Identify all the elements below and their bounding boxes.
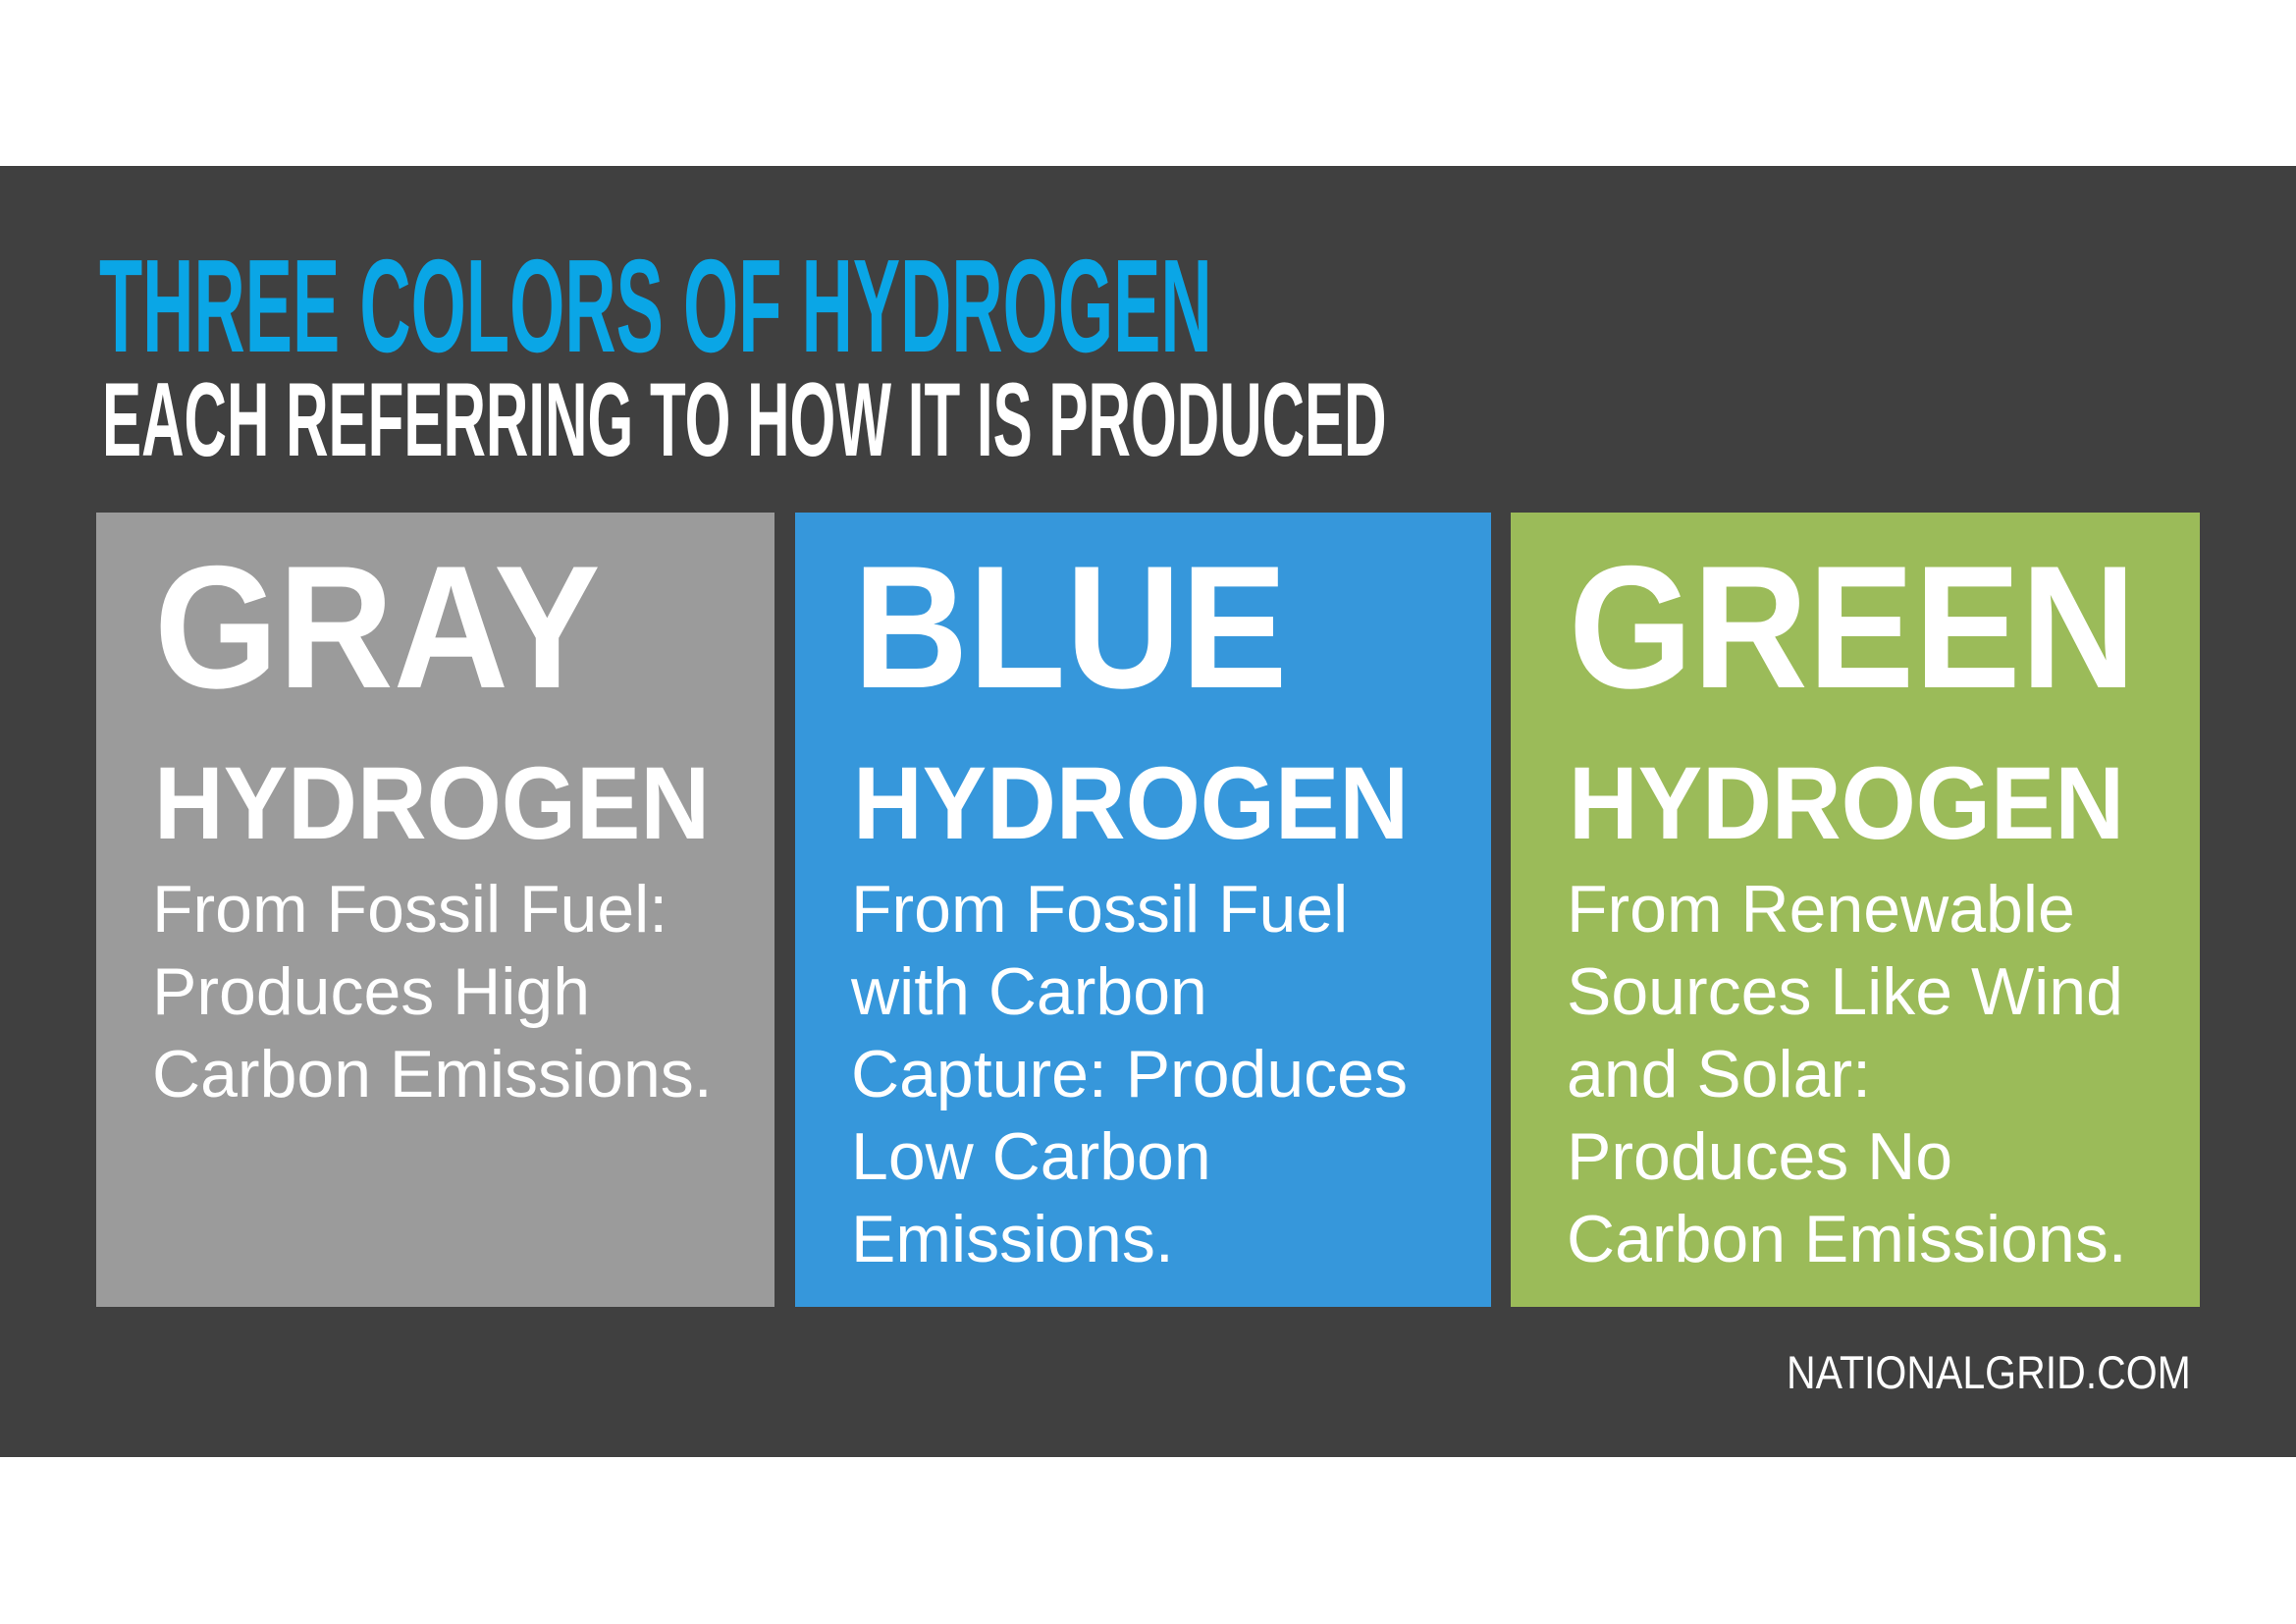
heading: GREEN: GREEN <box>1569 529 2136 725</box>
text: gray description <box>152 872 713 1111</box>
panel: blue hydrogen <box>795 513 1491 1307</box>
panel: green hydrogen <box>1511 513 2200 1307</box>
subheading: hydrogen: HYDROGEN <box>154 746 710 861</box>
heading: GRAY: GRAY <box>154 529 601 725</box>
text: blue description: Emissions. <box>851 1202 1174 1276</box>
text: gray description: From Fossil Fuel: <box>152 872 667 947</box>
text: blue description <box>850 872 1408 1276</box>
dark background band <box>0 166 2296 1457</box>
text: blue description: From Fossil Fuel <box>851 872 1348 947</box>
text: blue description: Capture: Produces <box>851 1037 1408 1111</box>
text: blue description: with Carbon <box>851 954 1207 1029</box>
text: green description: and Solar: <box>1567 1037 1871 1111</box>
title: THREE COLORS OF HYDROGEN <box>99 232 1212 380</box>
text: green description: Produces No <box>1567 1119 1952 1194</box>
subheading: hydrogen: HYDROGEN <box>853 746 1409 861</box>
text: green description <box>1567 872 2127 1276</box>
text: green description: From Renewable <box>1567 872 2075 947</box>
footer source: NATIONALGRID.COM <box>1787 1346 2191 1398</box>
text: green description: Carbon Emissions. <box>1567 1202 2127 1276</box>
text: gray description: Carbon Emissions. <box>152 1037 713 1111</box>
text: blue description: Low Carbon <box>851 1119 1211 1194</box>
text: gray description: Produces High <box>152 954 590 1029</box>
panel: gray hydrogen <box>96 513 774 1307</box>
subtitle: EACH REFERRING TO HOW IT IS PRODUCED <box>102 360 1387 478</box>
heading: BLUE: BLUE <box>853 529 1287 725</box>
subheading: hydrogen: HYDROGEN <box>1569 746 2124 861</box>
text: green description: Sources Like Wind <box>1567 954 2123 1029</box>
